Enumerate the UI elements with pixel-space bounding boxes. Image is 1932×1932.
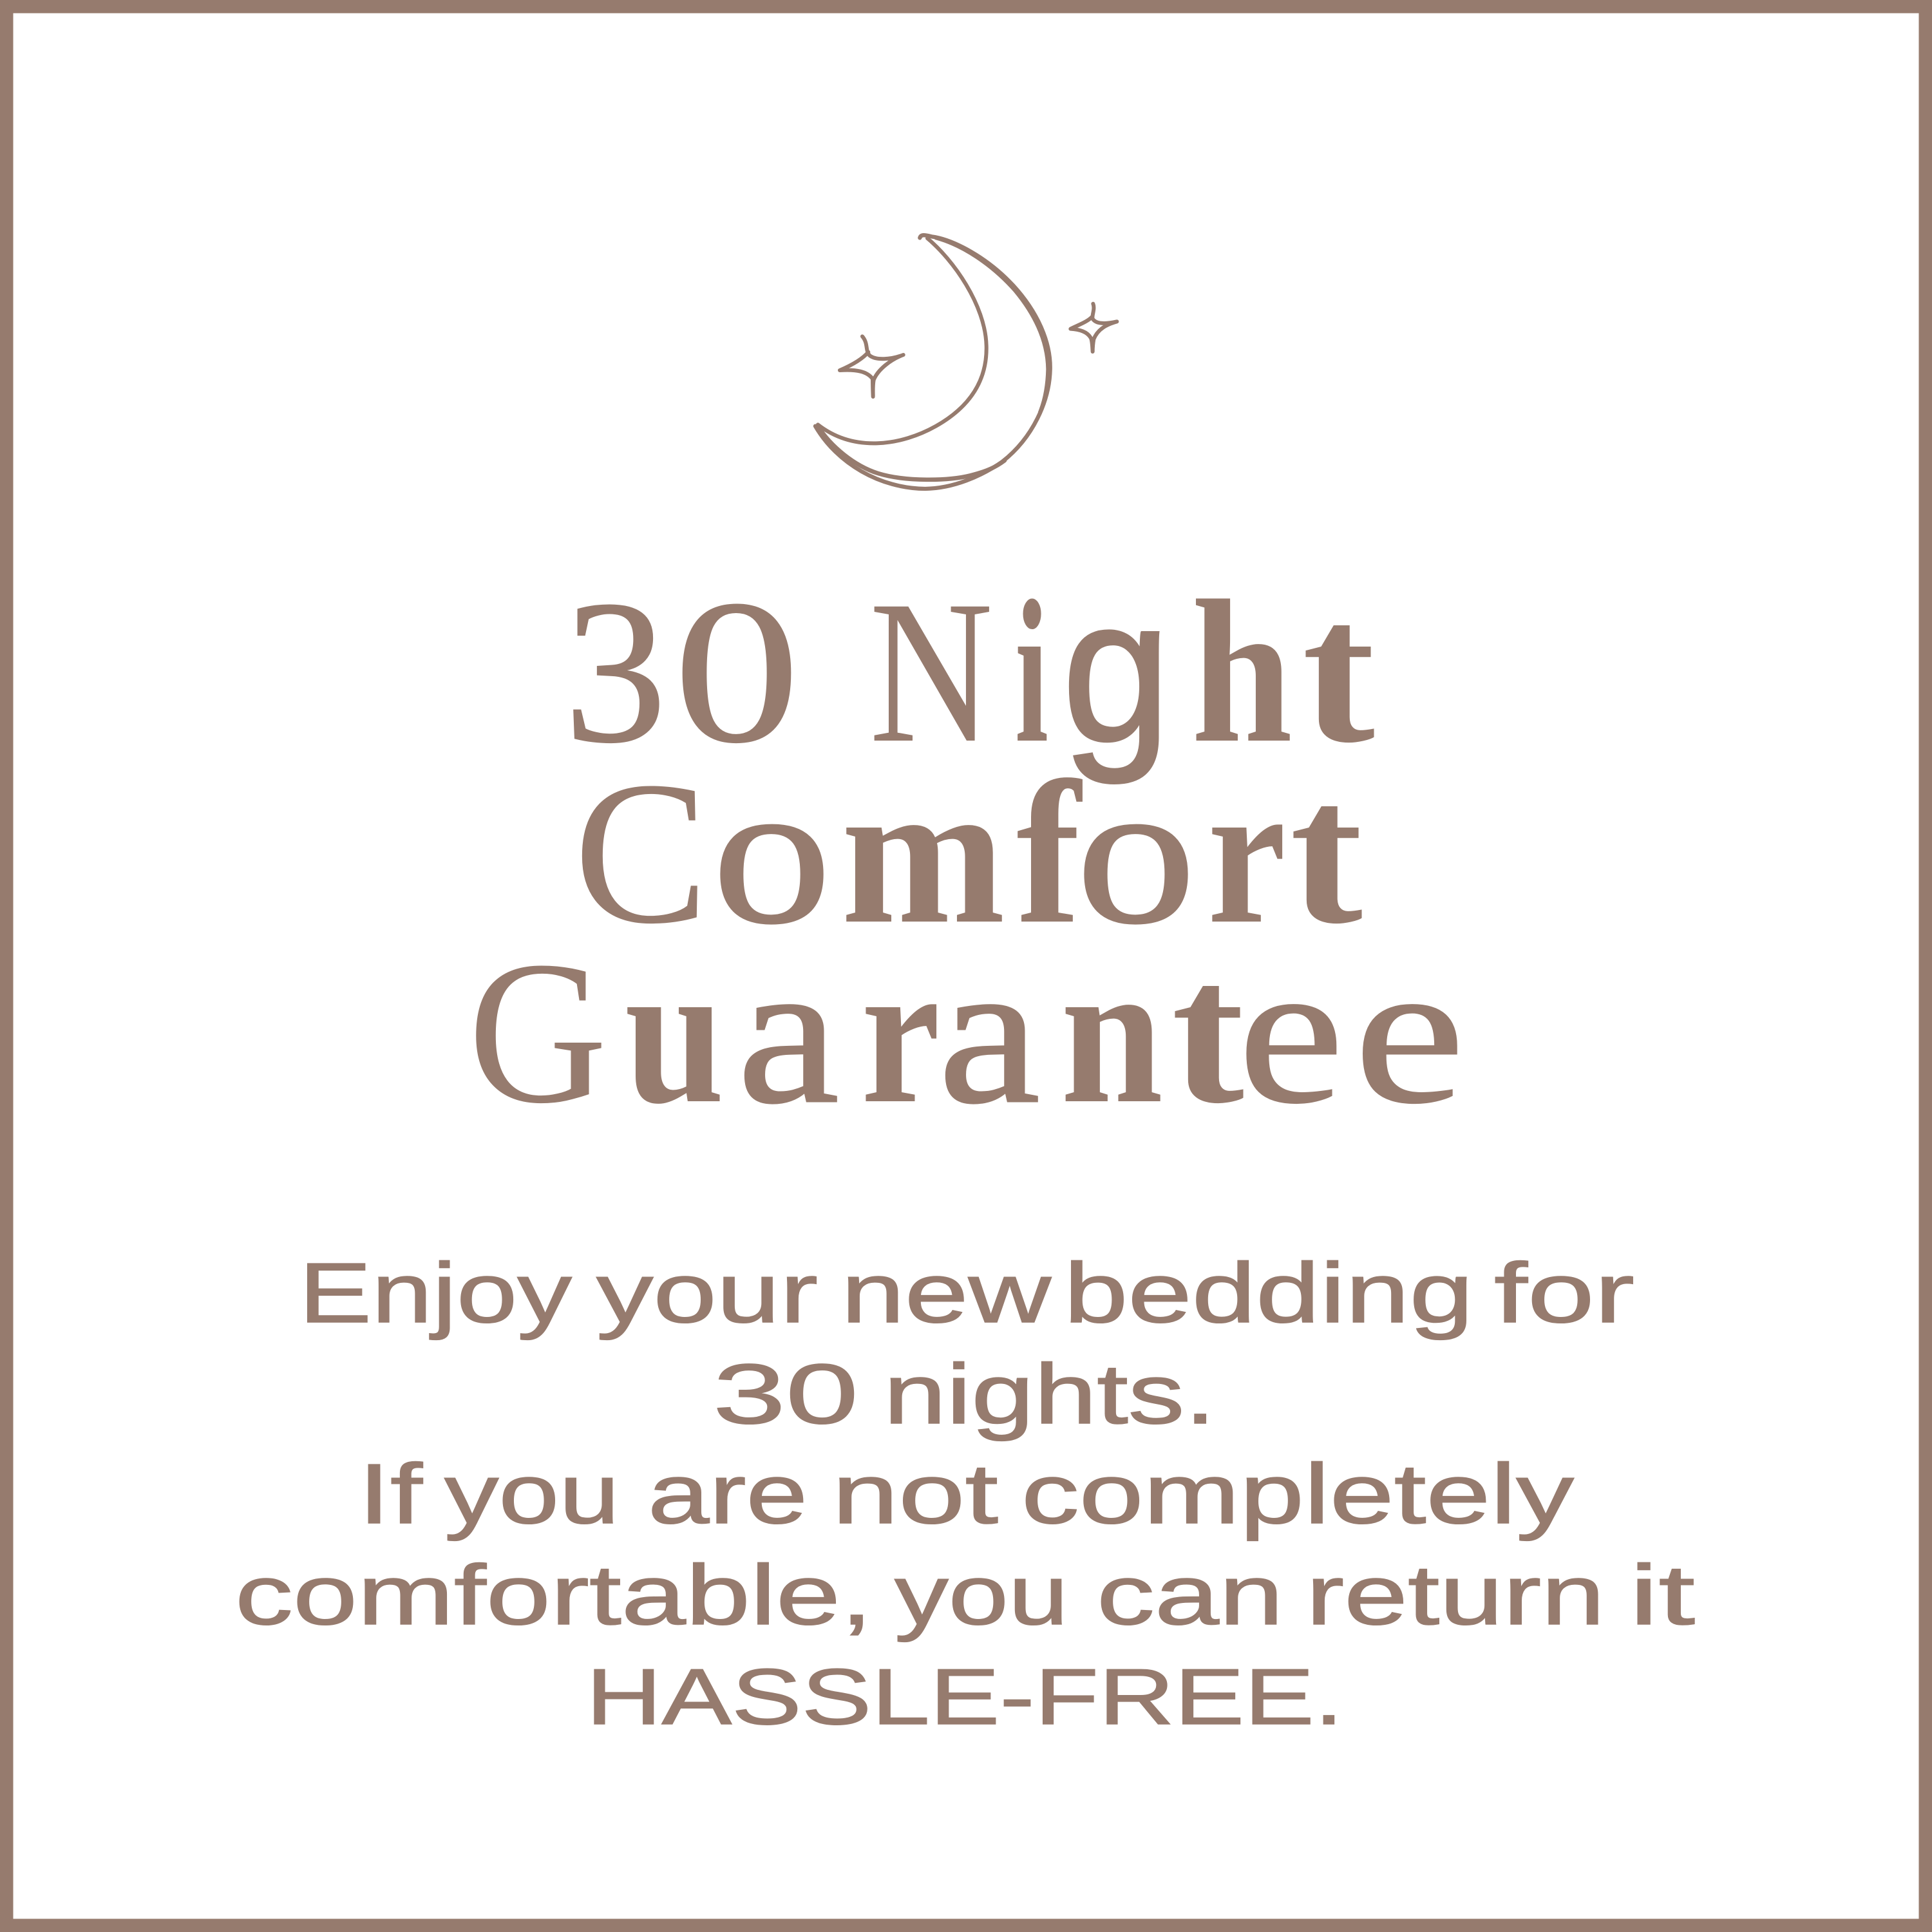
body line 1: for [1494, 1245, 1634, 1340]
body text [235, 1245, 1695, 1741]
title line 1: g [1062, 556, 1171, 786]
title line 3: t [1171, 919, 1247, 1146]
moon outer edge [815, 235, 1050, 489]
title [468, 556, 1465, 1146]
title line 3: e [1238, 919, 1344, 1146]
moon lower sketch line [818, 426, 1005, 480]
title line 1: i [1015, 558, 1048, 785]
title line 3: u [625, 919, 724, 1146]
body line 3: If [358, 1446, 422, 1541]
title line 3: a [737, 919, 839, 1146]
title line 2: o [1076, 739, 1196, 966]
title line 3: G [468, 919, 607, 1146]
title line 2: m [841, 739, 1005, 966]
body line 4: comfortable, [235, 1548, 873, 1642]
title line 2: C [574, 739, 708, 966]
body line 3: not [832, 1446, 998, 1541]
body line 3: are [648, 1446, 808, 1541]
body line 2: nights. [884, 1347, 1216, 1441]
title line 3: n [1061, 919, 1163, 1146]
body line 1: your [596, 1245, 818, 1340]
body line 1: bedding [1064, 1245, 1473, 1340]
title line 2: r [1208, 739, 1286, 966]
title line 1: h [1191, 558, 1293, 785]
title line 3: e [1354, 919, 1465, 1146]
title line 1: 0 [674, 558, 800, 785]
body line 4: can [1097, 1548, 1283, 1642]
title line 3: a [938, 919, 1040, 1146]
title line 2: f [1016, 739, 1083, 966]
body line 2: 30 [713, 1347, 858, 1441]
title line 2: o [712, 739, 831, 966]
body line 3: you [444, 1446, 620, 1541]
body line 4: it [1629, 1548, 1695, 1642]
title line 1: N [869, 558, 993, 785]
body line 1: new [841, 1245, 1052, 1340]
body line 3: completely [1021, 1446, 1574, 1541]
body line 5: HASSLE-FREE. [586, 1653, 1343, 1741]
icon: crescent moon with two stars [815, 235, 1117, 489]
right star [1070, 304, 1117, 352]
title line 1: t [1302, 558, 1378, 785]
body line 4: you [895, 1548, 1068, 1642]
body line 1: Enjoy [299, 1245, 572, 1340]
moon inner edge [818, 238, 987, 443]
title line 1: 3 [564, 558, 667, 785]
title line 2: t [1290, 739, 1365, 966]
body line 4: return [1306, 1548, 1605, 1642]
title line 3: r [861, 919, 940, 1146]
left star [840, 336, 904, 397]
moon thick right stroke [936, 238, 1048, 412]
